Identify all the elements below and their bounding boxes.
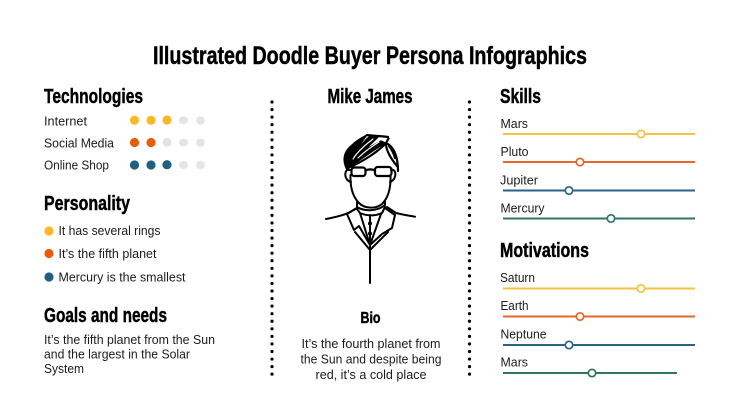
text: bio description: the Sun and despite being bbox=[300, 352, 442, 366]
heading: technologies: Technologies bbox=[44, 86, 143, 108]
icon: man with glasses portrait bbox=[326, 135, 415, 283]
panel: profile bbox=[300, 86, 442, 382]
text: bio description bbox=[300, 337, 442, 382]
slider: saturn: Saturn bbox=[500, 271, 535, 285]
slider: mars bbox=[500, 356, 677, 377]
heading: name: Mike James bbox=[328, 86, 412, 108]
panel: goals and needs bbox=[44, 305, 215, 376]
rating: online shop bbox=[44, 158, 205, 172]
heading: personality: Personality bbox=[44, 193, 131, 215]
slider: mercury bbox=[500, 202, 695, 222]
slider: earth: Earth bbox=[500, 299, 529, 313]
bullet: rings: It has several rings bbox=[58, 224, 160, 238]
rating: internet: Internet bbox=[44, 114, 88, 128]
heading: skills: Skills bbox=[500, 86, 541, 108]
slider: mercury: Mercury bbox=[500, 202, 545, 216]
panel: personality bbox=[44, 193, 186, 284]
text: goals description: It’s the fifth planet from the Sun bbox=[44, 333, 215, 347]
slider: pluto: Pluto bbox=[500, 145, 529, 159]
slider: saturn bbox=[500, 271, 695, 292]
rating: internet bbox=[44, 114, 205, 128]
slider: jupiter: Jupiter bbox=[500, 174, 538, 188]
rating: online shop: Online Shop bbox=[44, 158, 109, 172]
text: goals description: and the largest in the Solar bbox=[44, 348, 190, 362]
bullet: fifth planet: It’s the fifth planet bbox=[58, 247, 157, 261]
panel: motivations bbox=[500, 240, 695, 377]
rating: social media bbox=[44, 136, 205, 150]
panel: skills bbox=[500, 86, 695, 222]
slider: neptune: Neptune bbox=[500, 328, 547, 342]
text: bio description: It’s the fourth planet from bbox=[302, 337, 440, 351]
heading: bio: Bio bbox=[360, 310, 380, 327]
text: goals description: System bbox=[44, 362, 84, 376]
slider: pluto bbox=[500, 145, 695, 166]
slider: mars: Mars bbox=[500, 356, 528, 370]
text: bio description: red, it’s a cold place bbox=[316, 368, 427, 382]
text: goals description bbox=[44, 333, 215, 376]
slider: jupiter bbox=[500, 174, 695, 194]
bullet: smallest: Mercury is the smallest bbox=[58, 270, 186, 284]
heading: goals and needs: Goals and needs bbox=[44, 305, 167, 327]
slider: mars: Mars bbox=[500, 117, 528, 131]
panel: technologies bbox=[44, 86, 205, 172]
slider: neptune bbox=[500, 328, 695, 349]
title: Illustrated Doodle Buyer Persona Infographics bbox=[153, 42, 587, 70]
slider: earth bbox=[500, 299, 695, 320]
heading: motivations: Motivations bbox=[500, 240, 589, 262]
slider: mars bbox=[500, 117, 695, 138]
rating: social media: Social Media bbox=[44, 136, 114, 150]
